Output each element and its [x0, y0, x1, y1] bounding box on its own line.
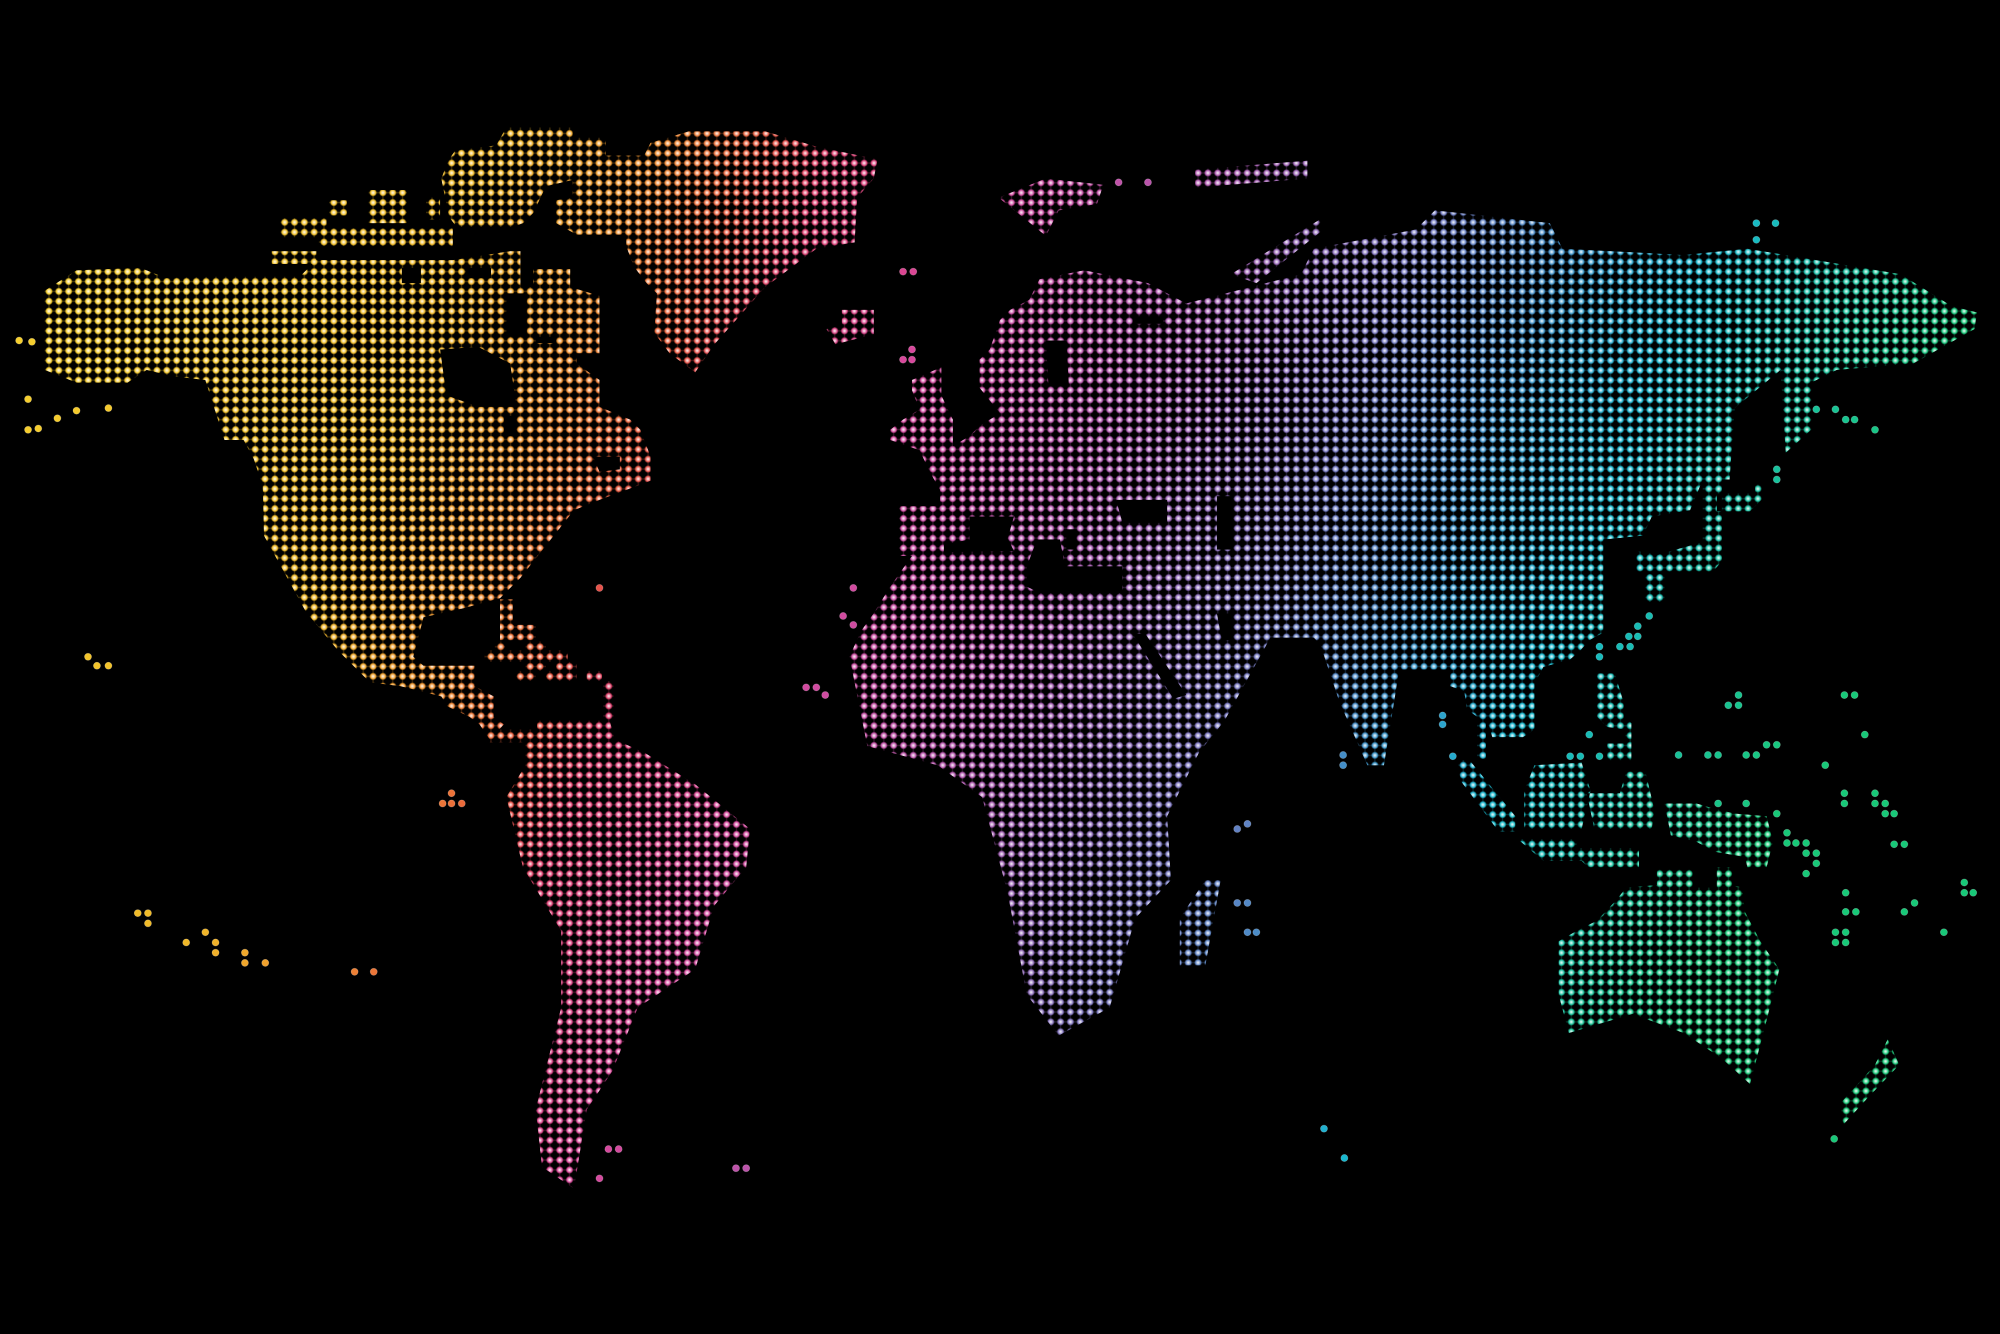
- Novaya Zemlya: [1231, 219, 1320, 283]
- dotted land masses: [45, 128, 1977, 1189]
- Svalbard and Franz Josef Land: [999, 161, 1307, 236]
- North America: [45, 251, 651, 740]
- dotted world map: [15, 128, 1978, 1188]
- Indonesia: [1458, 760, 1654, 867]
- New Guinea: [1665, 803, 1773, 867]
- Australia: [1559, 867, 1779, 1084]
- scattered island dots: [16, 179, 1977, 1182]
- Korea and Japan: [1636, 477, 1761, 602]
- Madagascar: [1180, 880, 1221, 965]
- Iceland: [827, 310, 874, 344]
- Canadian Arctic islands: [272, 190, 453, 264]
- Florida and Caribbean: [485, 599, 614, 722]
- Afro-Eurasia: [849, 210, 1977, 1036]
- Ellesmere Island and Greenland: [441, 128, 878, 372]
- South America: [490, 721, 750, 1189]
- New Zealand: [1841, 1039, 1899, 1125]
- Philippines: [1597, 673, 1631, 760]
